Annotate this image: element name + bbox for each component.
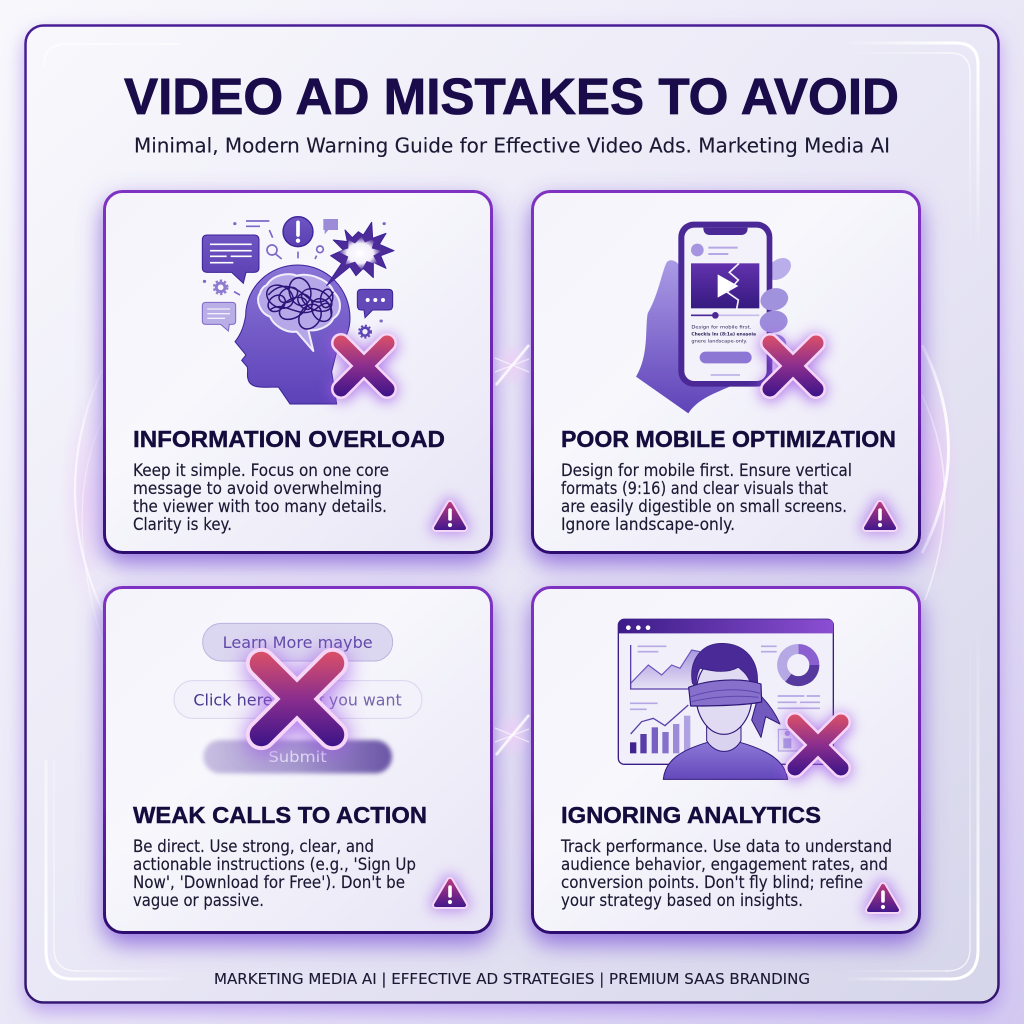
button: click here: Click here [193, 690, 273, 709]
icon: red x [795, 722, 841, 769]
button: submit: Submit [268, 749, 327, 766]
donut chart [782, 649, 814, 681]
body text: Keep it simple. Focus on one core [133, 461, 389, 481]
icon: small bubble [323, 219, 338, 234]
sparkle lower [495, 711, 529, 759]
body text: Now', 'Download for Free'). Don't be [133, 873, 405, 893]
body text: formats (9:16) and clear visuals that [561, 479, 828, 499]
body text [561, 461, 852, 535]
icon: gear dark [359, 326, 371, 338]
body text: Clarity is key. [133, 515, 232, 535]
body text: the viewer with too many details. [133, 497, 387, 517]
text placeholders [761, 646, 820, 708]
person [663, 643, 788, 779]
icon: warning triangle [869, 885, 897, 910]
micro text on phone: Checkis lnı (8:1a) enasoia [691, 332, 756, 338]
illustration: blindfolded analyst [618, 619, 833, 779]
body text: Track performance. Use data to understand [560, 837, 892, 857]
body text: message to avoid overwhelming [133, 479, 382, 499]
icon: magnifier [267, 245, 282, 259]
icon: overloaded head [202, 217, 394, 404]
body text: actionable instructions (e.g., 'Sign Up [133, 855, 416, 875]
heading: POOR MOBILE OPTIMIZATION [561, 426, 896, 452]
body text: Ignore landscape-only. [561, 515, 735, 535]
icon: light speech bubble [202, 302, 236, 331]
bar chart [630, 703, 690, 753]
heading: INFORMATION OVERLOAD [133, 426, 445, 452]
icon: small marks [204, 221, 384, 321]
icon: gear light [214, 281, 227, 294]
micro text on phone: gnere landscape-only. [691, 339, 747, 345]
icon: red x [261, 663, 333, 736]
body text: vague or passive. [133, 891, 264, 911]
icon: warning triangle [436, 880, 464, 905]
icon: alert circle [283, 217, 313, 247]
sparkle upper [495, 341, 529, 389]
panel: poor mobile optimization [532, 192, 920, 552]
icon: typing speech bubble [357, 289, 393, 318]
subtitle: Minimal, Modern Warning Guide for Effective Video Ads. Marketing Media AI [134, 134, 890, 158]
body text: your strategy based on insights. [561, 891, 803, 911]
area chart [631, 645, 700, 689]
blindfold [689, 680, 780, 737]
button: learn more: Learn More maybe [223, 633, 373, 652]
dashboard window [618, 619, 833, 764]
title: VIDEO AD MISTAKES TO AVOID [124, 68, 899, 125]
button: submit [203, 740, 392, 773]
body text: Design for mobile first. Ensure vertical [561, 461, 852, 481]
body text: Be direct. Use strong, clear, and [133, 837, 374, 857]
panel: weak calls to action [104, 588, 492, 932]
icon: warning triangle [866, 503, 894, 528]
icon: burst [327, 222, 394, 286]
button: learn more [203, 623, 393, 661]
illustration: weak buttons [174, 623, 422, 773]
heading: IGNORING ANALYTICS [561, 802, 821, 828]
icon: text speech bubble [202, 235, 259, 283]
button: click here: f you want [318, 690, 402, 709]
icon: phone in hand [636, 222, 795, 413]
body text: are easily digestible on small screens. [561, 497, 847, 517]
micro text on phone: Design for mobile first. [691, 325, 751, 331]
micro text on phone [691, 325, 756, 345]
icon: red x [770, 343, 816, 390]
button: click here [174, 681, 422, 718]
body text: audience behavior, engagement rates, and [561, 855, 888, 875]
body text [133, 461, 389, 535]
body text [560, 837, 892, 911]
icon: red x [341, 343, 387, 390]
panel: ignoring analytics [532, 588, 920, 932]
footer: MARKETING MEDIA AI | EFFECTIVE AD STRATEGIES | PREMIUM SAAS BRANDING [214, 970, 810, 988]
body text [133, 837, 416, 911]
body text: conversion points. Don't fly blind; refine [561, 873, 863, 893]
heading: WEAK CALLS TO ACTION [133, 802, 427, 828]
icon: warning triangle [436, 503, 464, 528]
panel: information overload [104, 192, 492, 552]
small thumbnail [778, 729, 808, 751]
